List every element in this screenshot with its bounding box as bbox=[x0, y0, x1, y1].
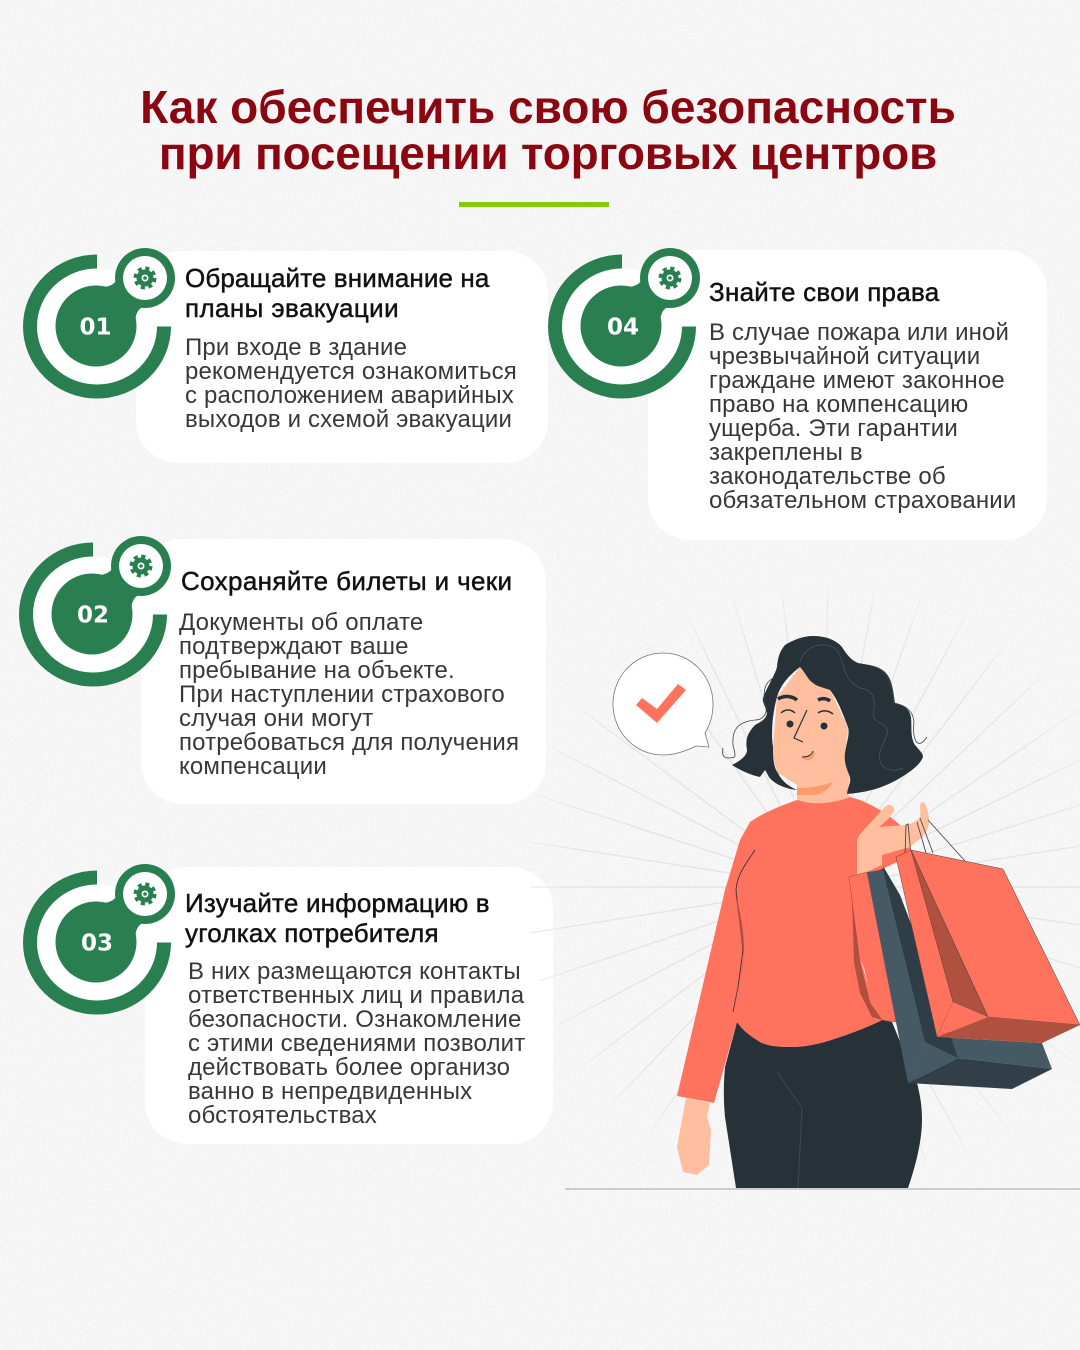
body text 03: безопасности. Ознакомление bbox=[188, 1006, 521, 1033]
heading 03: Изучайте информацию в bbox=[185, 888, 490, 918]
title bbox=[140, 81, 956, 179]
body text 01 bbox=[185, 334, 517, 433]
title: при посещении торговых центров bbox=[159, 127, 937, 179]
dark shopping bag bbox=[867, 865, 1052, 1089]
third shopping bag panel bbox=[849, 866, 958, 1083]
badge 02 with gear icon: 02 bbox=[77, 602, 109, 628]
badge 04 with gear icon: 04 bbox=[607, 314, 639, 340]
body text 01: рекомендуется ознакомиться bbox=[185, 358, 517, 385]
title underline bbox=[459, 202, 609, 207]
body text 03 bbox=[188, 958, 525, 1129]
badge 03 with gear icon bbox=[23, 864, 175, 1014]
body text 03: ванно в непредвиденных bbox=[188, 1078, 472, 1105]
sweater bbox=[677, 797, 912, 1103]
heading 01: Обращайте внимание на bbox=[185, 263, 489, 293]
badge 01 with gear icon bbox=[23, 248, 175, 398]
body text 02: случая они могут bbox=[179, 705, 373, 732]
panel: step 03 bbox=[23, 864, 553, 1144]
body text 04: чрезвычайной ситуации bbox=[709, 343, 980, 370]
badge 04 with gear icon bbox=[548, 248, 700, 398]
body text 01: с расположением аварийных bbox=[185, 382, 514, 409]
body text 02: При наступлении страхового bbox=[179, 681, 505, 708]
body text 01: При входе в здание bbox=[185, 334, 407, 361]
body text 02: Документы об оплате bbox=[179, 609, 423, 636]
body text 02: пребывание на объекте. bbox=[179, 657, 455, 684]
heading 03: уголках потребителя bbox=[185, 918, 439, 948]
body text 02: подтверждают ваше bbox=[179, 633, 409, 660]
heading 02: Сохраняйте билеты и чеки bbox=[181, 566, 512, 596]
hair bbox=[732, 636, 923, 794]
body text 01: выходов и схемой эвакуации bbox=[185, 406, 512, 433]
body text 04: законодательстве об bbox=[709, 463, 946, 490]
title: Как обеспечить свою безопасность bbox=[140, 81, 956, 133]
body text 04: ущерба. Эти гарантии bbox=[709, 415, 958, 442]
body text 03: В них размещаются контакты bbox=[188, 958, 521, 985]
panel: step 04 bbox=[548, 248, 1047, 540]
body text 04: В случае пожара или иной bbox=[709, 319, 1009, 346]
panel: step 02 bbox=[19, 536, 546, 804]
speech bubble with check mark bbox=[613, 653, 713, 755]
left hand bbox=[677, 1098, 711, 1175]
body text 03: действовать более организо bbox=[188, 1054, 510, 1081]
floor line bbox=[565, 1188, 1080, 1190]
body text 04: обязательном страховании bbox=[709, 487, 1016, 514]
panel: step 01 bbox=[23, 248, 548, 463]
body text 03: с этими сведениями позволит bbox=[188, 1030, 525, 1057]
raised hand bbox=[857, 802, 929, 877]
body text 04: право на компенсацию bbox=[709, 391, 968, 418]
heading 04: Знайте свои права bbox=[709, 277, 939, 307]
pants bbox=[724, 1020, 922, 1188]
heading 03 bbox=[184, 888, 490, 948]
red shopping bag bbox=[896, 818, 1080, 1043]
neck and face bbox=[773, 667, 850, 804]
heading 01: планы эвакуации bbox=[185, 293, 399, 323]
body text 04 bbox=[709, 319, 1016, 514]
body text 04: закреплены в bbox=[709, 439, 863, 466]
badge 02 with gear icon bbox=[19, 536, 171, 686]
body text 03: обстоятельствах bbox=[188, 1102, 377, 1129]
heading 01 bbox=[185, 263, 490, 323]
face details bbox=[778, 696, 833, 795]
badge 03 with gear icon: 03 bbox=[81, 930, 113, 956]
body text 02 bbox=[179, 609, 519, 780]
badge 01 with gear icon: 01 bbox=[79, 314, 112, 340]
body text 03: ответственных лиц и правила bbox=[188, 982, 524, 1009]
body text 02: потребоваться для получения bbox=[179, 729, 519, 756]
illustration: woman with shopping bags bbox=[530, 588, 1080, 1190]
body text 02: компенсации bbox=[179, 753, 327, 780]
body text 04: граждане имеют законное bbox=[709, 367, 1005, 394]
